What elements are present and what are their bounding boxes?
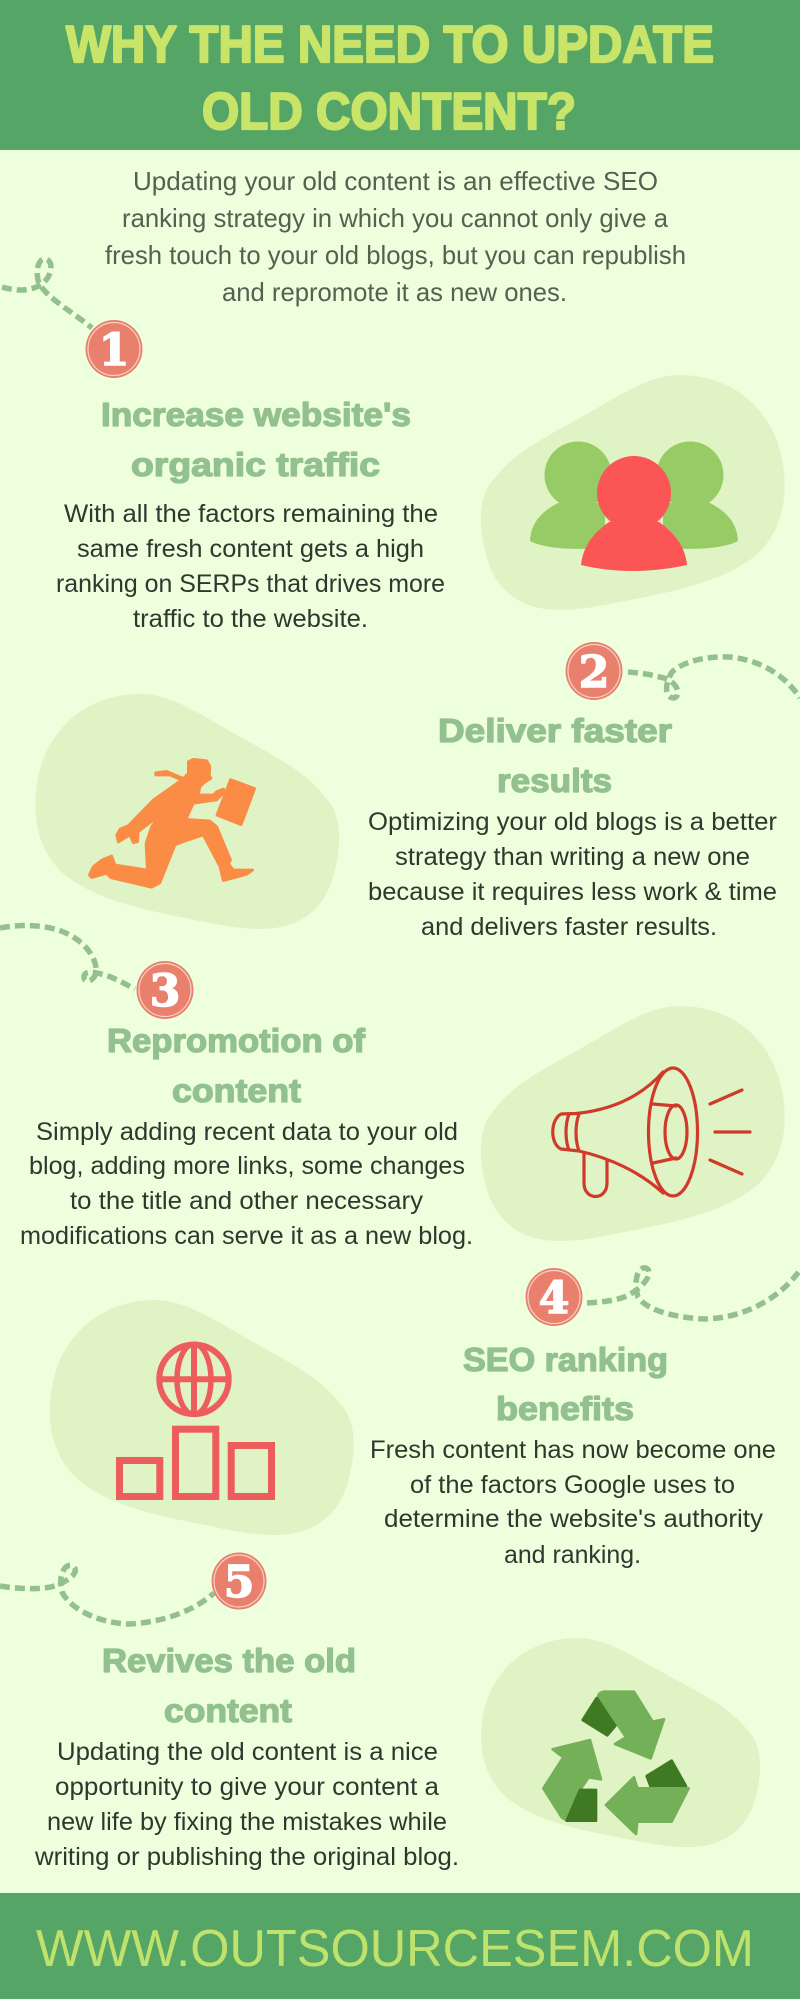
body text 2 [368, 808, 777, 941]
heading 5: content [164, 1692, 292, 1729]
heading 4 [463, 1341, 668, 1427]
footer banner [0, 1893, 800, 1999]
footer url: WWW.OUTSOURCESEM.COM [36, 1920, 754, 1978]
panel: repromotion of content [20, 961, 785, 1250]
title: OLD CONTENT? [202, 83, 576, 141]
intro text: ranking strategy in which you cannot only give a [122, 203, 669, 233]
icon: globe on podium [120, 1344, 272, 1496]
intro text: and repromote it as new ones. [222, 277, 567, 307]
body text 3: modifications can serve it as a new blog. [20, 1222, 473, 1250]
heading 2 [438, 712, 672, 799]
blob background 2 [35, 694, 339, 929]
heading 1: organic traffic [131, 446, 380, 483]
number badge 3: 3 [150, 966, 180, 1017]
body text 2: Optimizing your old blogs is a better [368, 808, 777, 836]
dashed connector 4 [587, 1268, 800, 1319]
body text 2: because it requires less work & time [368, 878, 777, 906]
icon: people [530, 442, 738, 571]
heading 4: benefits [496, 1390, 634, 1427]
header banner [0, 0, 800, 150]
body text 5: new life by fixing the mistakes while [47, 1808, 447, 1836]
heading 3 [107, 1022, 366, 1109]
panel: deliver faster results [35, 642, 777, 941]
blob background 1 [481, 375, 785, 610]
body text 4: and ranking. [504, 1541, 641, 1569]
number badge 2: 2 [579, 647, 609, 698]
body text 4: Fresh content has now become one [370, 1436, 776, 1464]
body text 1: traffic to the website. [133, 605, 368, 633]
blob background 4 [50, 1300, 354, 1535]
dashed connector 3 [0, 926, 135, 989]
title [66, 16, 714, 141]
number badge 4: 4 [539, 1273, 569, 1324]
body text 1: same fresh content gets a high [77, 535, 424, 563]
intro text: Updating your old content is an effective SEO [133, 166, 658, 196]
heading 2: Deliver faster [438, 712, 672, 749]
number badge 1: 1 [99, 325, 129, 376]
icon: recycle arrows [543, 1692, 689, 1834]
heading 3: Repromotion of [107, 1022, 366, 1059]
body text 5: writing or publishing the original blog. [34, 1843, 459, 1871]
dashed connector 2 [628, 657, 800, 698]
heading 5 [102, 1642, 356, 1729]
body text 3: to the title and other necessary [70, 1187, 424, 1215]
heading 5: Revives the old [102, 1642, 356, 1679]
number badge 5: 5 [224, 1557, 254, 1608]
blob background 5 [481, 1638, 760, 1847]
body text 3: blog, adding more links, some changes [29, 1152, 465, 1180]
body text 2: and delivers faster results. [421, 913, 717, 941]
dashed connector 5 [0, 1565, 214, 1624]
heading 2: results [497, 762, 612, 799]
panel: increase organic traffic [56, 320, 785, 633]
icon: running man with briefcase [89, 759, 254, 887]
icon: megaphone [553, 1068, 750, 1196]
heading 3: content [172, 1072, 301, 1109]
intro text [105, 166, 686, 307]
heading 4: SEO ranking [463, 1341, 668, 1378]
number badge 3 [136, 961, 194, 1019]
number badge 4 [526, 1268, 582, 1326]
body text 1 [56, 500, 445, 633]
panel: seo ranking benefits [50, 1268, 776, 1569]
body text 5 [34, 1738, 459, 1871]
heading 1 [101, 396, 411, 483]
heading 1: Increase website's [101, 396, 411, 433]
body text 5: Updating the old content is a nice [57, 1738, 438, 1766]
body text 3: Simply adding recent data to your old [36, 1118, 458, 1146]
body text 3 [20, 1118, 473, 1250]
blob background 3 [481, 1006, 785, 1241]
intro text: fresh touch to your old blogs, but you can republish [105, 240, 686, 270]
number badge 5 [212, 1552, 266, 1610]
body text 2: strategy than writing a new one [395, 843, 750, 871]
body text 1: With all the factors remaining the [64, 500, 438, 528]
dashed connector 1 [2, 259, 92, 328]
body text 4: determine the website's authority [384, 1505, 764, 1533]
title: WHY THE NEED TO UPDATE [66, 16, 714, 74]
body text 4 [370, 1436, 776, 1569]
body text 4: of the factors Google uses to [410, 1471, 735, 1499]
panel: revives the old content [34, 1552, 760, 1871]
number badge 2 [566, 642, 622, 700]
body text 1: ranking on SERPs that drives more [56, 570, 445, 598]
body text 5: opportunity to give your content a [55, 1773, 439, 1801]
number badge 1 [86, 320, 142, 378]
